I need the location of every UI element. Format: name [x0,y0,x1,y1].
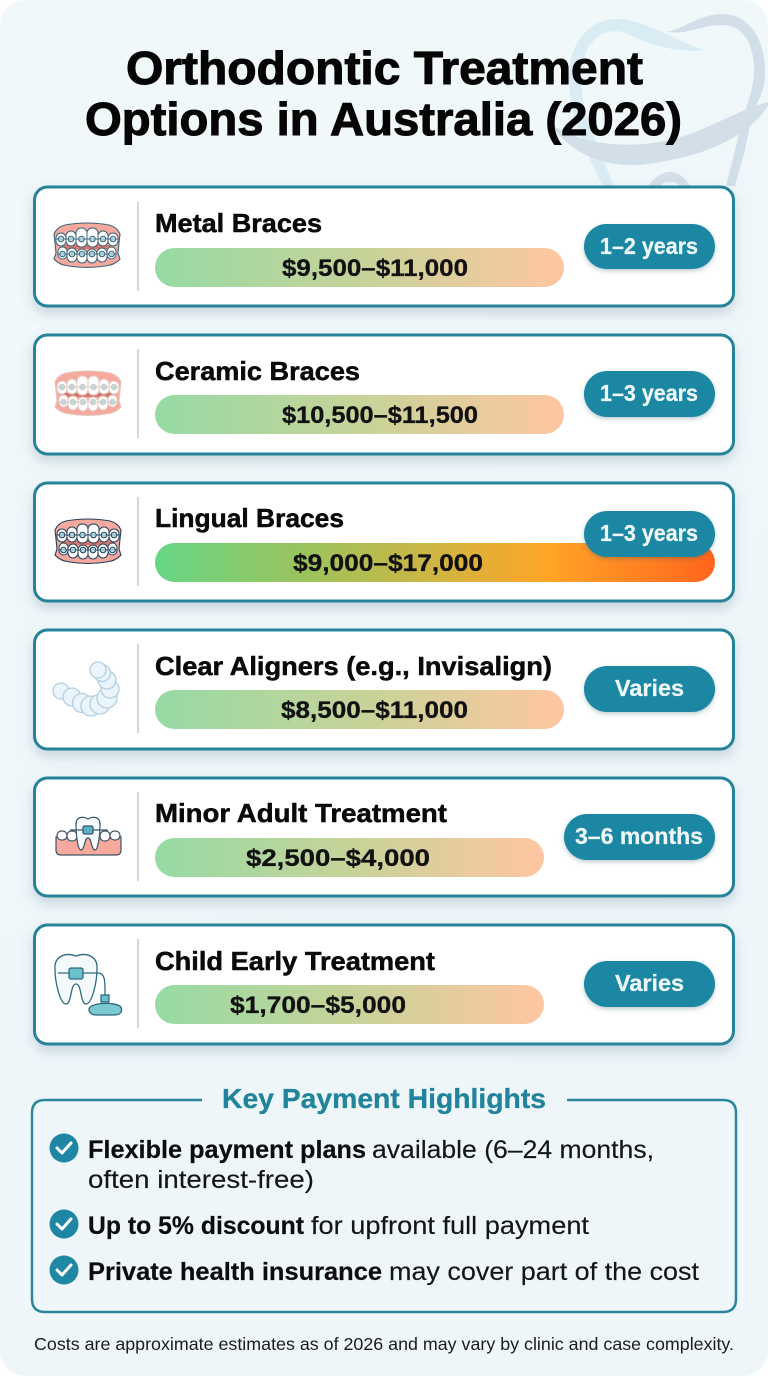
heading: minor adult treatment: Minor Adult Treatment [155,798,447,828]
text: payment plans: Flexible payment plans [88,1136,366,1164]
heading: child early treatment: Child Early Treatment [155,946,435,976]
duration pill: clear aligners: Varies [615,675,684,701]
panel: metal braces [34,187,734,306]
price bar: ceramic braces [155,395,564,434]
heading: clear aligners: Clear Aligners (e.g., Invisalign) [155,651,552,681]
text: health insurance: Private health insurance [88,1258,382,1286]
price bar: metal braces: $9,500–$11,000 [282,255,468,282]
duration pill: minor adult treatment [564,814,715,860]
duration pill: minor adult treatment: 3–6 months [575,823,703,849]
watermark: tooth outline [550,14,768,186]
icon: metal braces [54,223,120,268]
duration pill: ceramic braces: 1–3 years [600,380,698,406]
icon: lingual braces [55,519,121,564]
icon: ceramic braces [55,371,121,416]
icon: tooth with expander [55,955,122,1015]
price bar: minor adult treatment: $2,500–$4,000 [246,845,430,872]
heading: metal braces: Metal Braces [155,208,322,238]
title: Options in Australia (2026) [85,93,682,145]
duration pill: metal braces [584,224,715,269]
icon: single tooth with bracket [56,817,121,855]
price bar: ceramic braces: $10,500–$11,500 [282,402,478,429]
price bar: lingual braces: $9,000–$17,000 [293,550,483,577]
text: payment plans [88,1136,654,1194]
heading: key payment highlights: Key Payment Highlights [222,1083,546,1114]
price bar: metal braces [155,248,564,287]
price bar: clear aligners [155,690,564,729]
price bar: child early treatment: $1,700–$5,000 [230,992,406,1019]
duration pill: child early treatment [584,961,715,1007]
duration pill: lingual braces [584,511,715,557]
panel: ceramic braces [34,335,734,454]
panel: clear aligners [34,630,734,749]
price bar: clear aligners: $8,500–$11,000 [281,697,468,724]
panel: lingual braces [34,483,734,601]
price bar: minor adult treatment [155,838,544,877]
text: payment plans: available (6–24 months, [372,1136,654,1164]
panel: key payment highlights [32,1083,736,1312]
duration pill: lingual braces: 1–3 years [600,520,698,546]
icon: check 2 [50,1210,78,1238]
price bar: child early treatment [155,985,544,1024]
heading: ceramic braces: Ceramic Braces [155,356,360,386]
text: health insurance [88,1258,699,1286]
duration pill: ceramic braces [584,371,715,417]
icon: clear aligner [53,662,119,716]
duration pill: metal braces: 1–2 years [600,233,698,259]
footnote: Costs are approximate estimates as of 2026 and may vary by clinic and case complexity. [34,1334,734,1354]
text: upfront discount: for upfront full payment [311,1212,589,1240]
icon: check 1 [50,1134,78,1162]
icon: check 3 [50,1256,78,1284]
text: upfront discount [88,1212,589,1240]
text: health insurance: may cover part of the cost [389,1258,699,1286]
duration pill: child early treatment: Varies [615,970,684,996]
price bar: lingual braces [155,543,715,582]
panel: child early treatment [34,925,734,1044]
panel: minor adult treatment [34,778,734,896]
title [85,42,682,145]
text: payment plans: often interest-free) [88,1166,314,1194]
duration pill: clear aligners [584,666,715,712]
heading: lingual braces: Lingual Braces [155,503,344,533]
text: upfront discount: Up to 5% discount [88,1212,305,1240]
title: Orthodontic Treatment [126,42,643,94]
